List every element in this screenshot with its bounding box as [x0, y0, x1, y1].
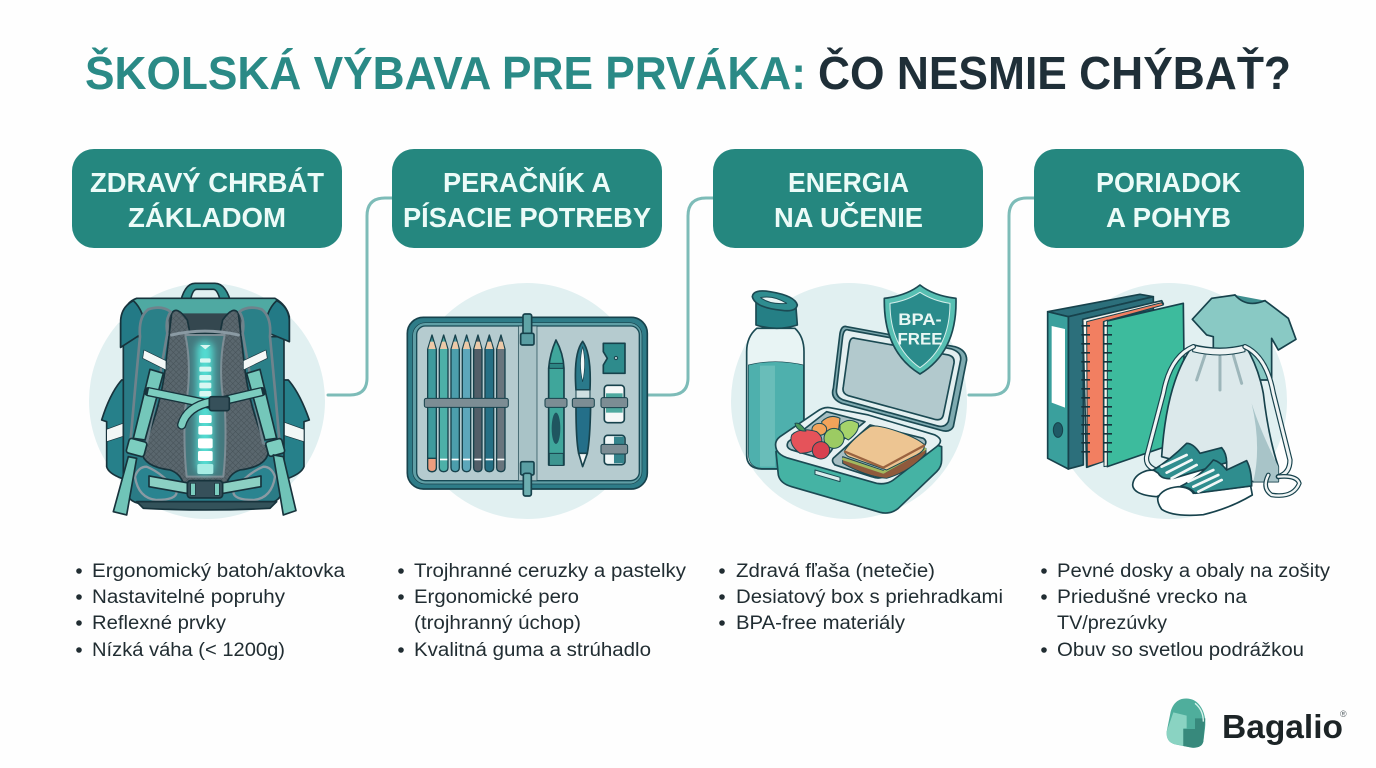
sandwich — [843, 426, 926, 478]
illustration background circles — [89, 283, 1287, 519]
text block: order and movement bullet list: Priedušné vrecko na — [1057, 587, 1247, 608]
panel: heading poriadok: PORIADOK — [1096, 167, 1241, 198]
logo: Bagalio — [1167, 699, 1347, 748]
panel: heading peračník — [392, 149, 662, 248]
text block: order and movement bullet list: Pevné dosky a obaly na zošity — [1057, 561, 1331, 582]
binder — [1048, 294, 1153, 469]
panel: heading poriadok: A POHYB — [1106, 202, 1231, 233]
text block: order and movement bullet list: TV/prezúvky — [1057, 613, 1168, 634]
text block: pencil case bullet list: (trojhranný úchop) — [414, 613, 581, 634]
lunch box base — [776, 408, 942, 513]
BPA-free shield: BPA- — [898, 310, 942, 329]
text block: lunch bullet list: Desiatový box s priehradkami — [736, 587, 1003, 608]
panel: heading energia — [713, 149, 983, 248]
text block: order and movement bullet list — [1041, 561, 1331, 661]
text block: backpack bullet list — [76, 561, 345, 661]
title — [85, 47, 1291, 99]
text block: lunch bullet list: BPA-free materiály — [736, 613, 906, 634]
fruit — [791, 416, 859, 459]
arrow: connector backpack to pencil case — [328, 198, 392, 395]
text block: lunch bullet list — [719, 561, 1003, 634]
t-shirt — [1192, 295, 1296, 380]
panel: heading peračník: PÍSACIE POTREBY — [403, 202, 651, 233]
icon: backpack with glowing spine — [102, 283, 309, 515]
lunch box lid — [833, 326, 967, 431]
arrow: connector pencil case to lunch box — [648, 198, 713, 395]
text block: backpack bullet list: Reflexné prvky — [92, 613, 227, 634]
text block: backpack bullet list: Nastavitelné popruhy — [92, 587, 286, 608]
text block: backpack bullet list: Nízká váha (< 1200g) — [92, 640, 285, 661]
text block: pencil case bullet list: Trojhranné ceruzky a pastelky — [414, 561, 687, 582]
text block: backpack bullet list: Ergonomický batoh/aktovka — [92, 561, 345, 582]
logo: Bagalio: ® — [1340, 709, 1347, 719]
panel: heading zdravý chrbát: ZÁKLADOM — [128, 202, 286, 233]
panel: heading zdravý chrbát: ZDRAVÝ CHRBÁT — [90, 167, 324, 198]
panel: heading peračník: PERAČNÍK A — [443, 166, 611, 198]
icon: open pencil case — [407, 314, 647, 496]
BPA-free shield — [884, 285, 956, 374]
text block: pencil case bullet list: Kvalitná guma a strúhadlo — [414, 640, 651, 661]
panel: heading poriadok — [1034, 149, 1304, 248]
water bottle — [747, 291, 804, 469]
text block: pencil case bullet list: Ergonomické pero — [414, 587, 579, 608]
BPA-free shield: FREE — [897, 330, 942, 349]
text block: pencil case bullet list — [398, 561, 687, 661]
icon: binder, notebooks, t-shirt, gym bag and sneakers — [1048, 294, 1299, 515]
text block: order and movement bullet list: Obuv so svetlou podrážkou — [1057, 640, 1304, 661]
notebooks — [1083, 301, 1163, 467]
text block: lunch bullet list: Zdravá fľaša (netečie) — [736, 561, 935, 582]
drawstring bag — [1162, 345, 1278, 482]
panel: heading zdravý chrbát — [72, 149, 342, 248]
panel: heading energia: ENERGIA — [788, 167, 909, 198]
title: ŠKOLSKÁ VÝBAVA PRE PRVÁKA: — [85, 47, 806, 99]
arrow: connector lunch box to school items — [969, 198, 1034, 395]
panel: heading energia: NA UČENIE — [774, 201, 923, 233]
title: ČO NESMIE CHÝBAŤ? — [818, 47, 1291, 99]
icon: water bottle and lunch box with BPA-free shield — [747, 285, 967, 513]
sneakers — [1133, 443, 1252, 515]
logo: Bagalio: Bagalio — [1222, 708, 1343, 745]
